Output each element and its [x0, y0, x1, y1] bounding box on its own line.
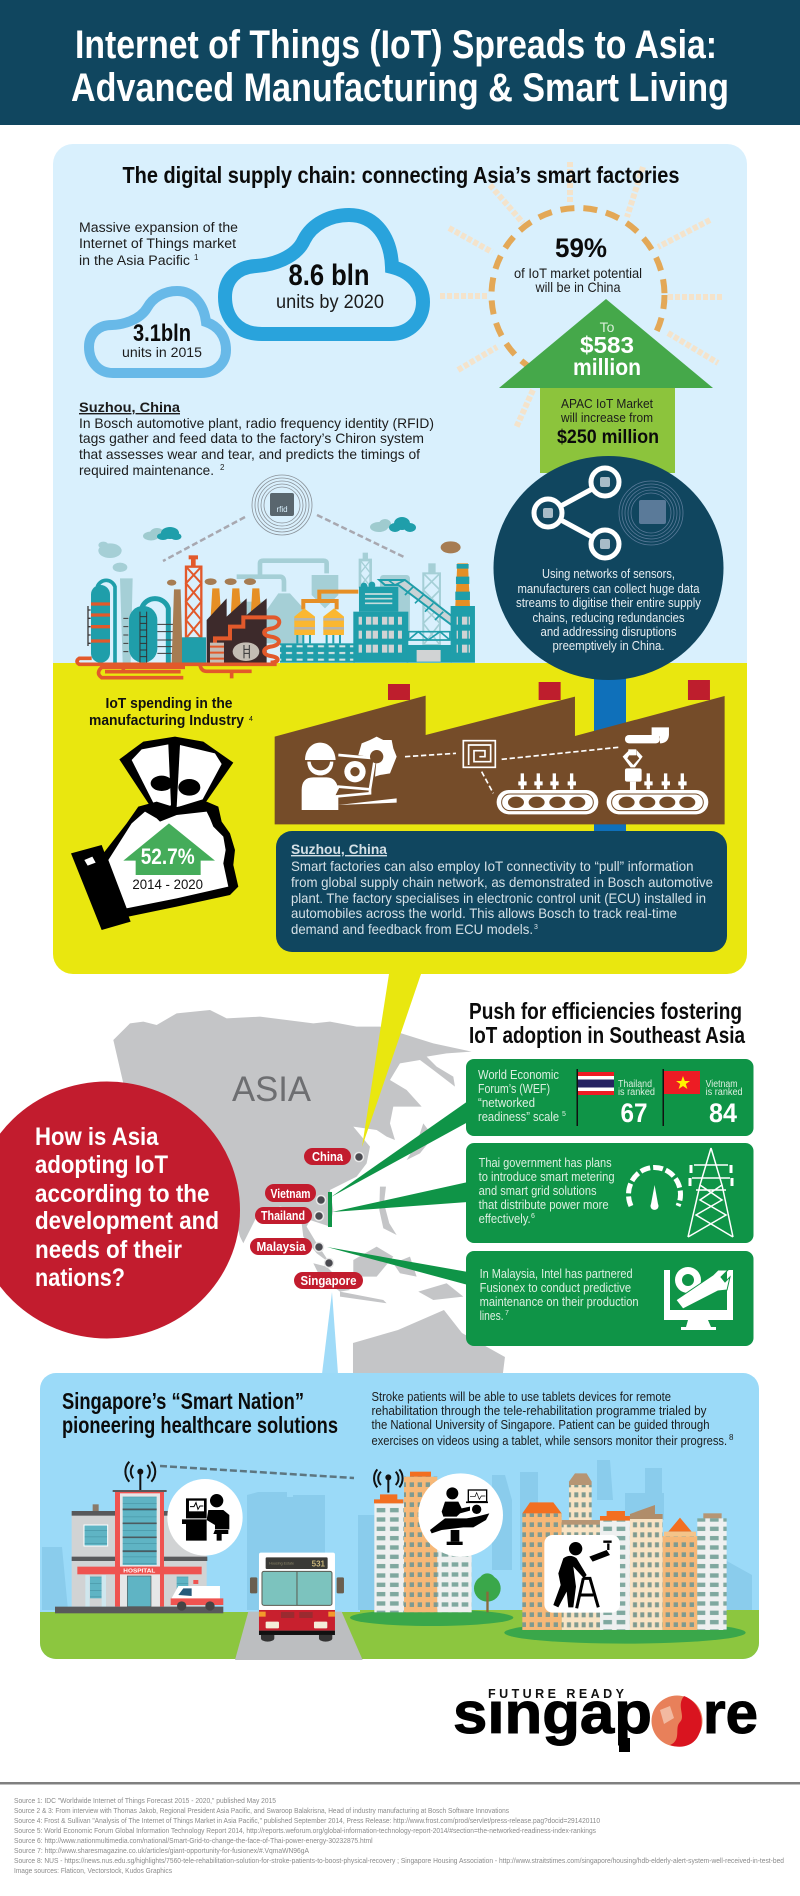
conveyor truss [379, 580, 452, 625]
stat: 52.7 percent: 52.7% [141, 844, 195, 869]
icon: RFID tag [252, 475, 312, 535]
callout: Suzhou pull information: from global supply chain network, as demonstrated in Bosch automotive [291, 874, 713, 890]
stat: 52.7 percent: 2014 - 2020 [132, 876, 203, 892]
worker icon [302, 737, 397, 810]
block A [374, 1503, 404, 1612]
icon: gauge [628, 1167, 680, 1210]
money fan [119, 737, 233, 822]
icon: ambulance [171, 1580, 223, 1611]
stat: 52.7 percent [132, 844, 203, 892]
icon: hand holding money [71, 737, 238, 930]
text: market expansion intro: Massive expansion of the [79, 220, 238, 235]
illustration: factory silhouette with IoT icons [275, 680, 725, 824]
hand [103, 802, 238, 917]
text: Suzhou RFID: In Bosch automotive plant, radio frequency identity (RFID) [79, 415, 434, 431]
text: market expansion intro: 1 [194, 253, 199, 262]
logo: Future Ready Singapore: re [703, 1681, 758, 1746]
icon: monitor with tools [664, 1267, 733, 1330]
panel: Thai smart grid: and smart grid solutions [479, 1184, 597, 1198]
text: market expansion intro [79, 220, 238, 268]
base pipes [77, 658, 277, 678]
header banner [0, 0, 800, 125]
green mound left [350, 1609, 513, 1626]
sources: Source 6: http://www.nationmultimedia.com/national/Smart-Grid-to-change-the-face-of-Thai-power-energy-30232875.html [14, 1838, 373, 1845]
text: Suzhou RFID: that assesses wear and tear, and predicts the timings of [79, 446, 420, 462]
callout: Suzhou pull information: 3 [534, 924, 538, 931]
stat: Thailand 67: is ranked [618, 1087, 655, 1098]
pointer: blue to Singapore [322, 1292, 338, 1374]
sun dashed circle [492, 208, 664, 382]
icon: elderly walker and camera [544, 1535, 620, 1613]
map pins [314, 1152, 364, 1268]
sources: Source 8: NUS - https://news.nus.edu.sg/highlights/7560-tele-rehabilitation-solution-for-stroke-patients-to-boost-physical-recovery ; Singapore Housing Association - http://www.straitstimes.com/singapore/housing/hdb-elderly-alert-system-well-received-in-test-bed [14, 1858, 784, 1865]
cloud: 8.6 bln units by 2020 [225, 215, 423, 334]
stat: Vietnam 84: is ranked [706, 1087, 743, 1098]
brown factory [275, 696, 725, 824]
cloud: 3.1 bln units in 2015: 3.1bln [133, 320, 191, 347]
callout: Suzhou pull information: Suzhou, China [291, 841, 387, 857]
stat: 59 percent: of IoT market potential [514, 265, 642, 281]
block B [404, 1477, 437, 1612]
cloud: 3.1 bln units in 2015: units in 2015 [122, 344, 202, 360]
antenna [374, 1469, 403, 1493]
text: sensors: Using networks of sensors, [542, 566, 675, 581]
red lattice tower [186, 567, 201, 638]
panel: Thai smart grid: Thai government has plans [479, 1156, 612, 1170]
icon: faded RFID tag [619, 481, 683, 545]
panel: Thai smart grid: 6 [531, 1213, 535, 1220]
text: sensors: preemptively in China. [552, 638, 664, 653]
panel: Malaysia predictive maintenance [466, 1251, 754, 1346]
icon: Thai flag [576, 1069, 614, 1126]
panel: Thai smart grid: effectively. [479, 1212, 531, 1226]
panel: Thai smart grid: to introduce smart metering [479, 1170, 615, 1184]
text: tele-rehabilitation [372, 1389, 734, 1448]
stat: 59 percent: 59% [555, 233, 607, 263]
text: tele-rehabilitation: the National University of Singapore. Patient can be guided through [372, 1417, 710, 1432]
text: sensors: and addressing disruptions [540, 624, 677, 639]
text: Suzhou RFID: required maintenance. [79, 462, 214, 478]
map: Asia silhouette [113, 1010, 505, 1373]
icon: RFID tag: rfid [276, 505, 288, 514]
left vessel [97, 580, 115, 663]
pointer: yellow to China [362, 974, 421, 1147]
clouds: small teal [143, 517, 416, 540]
text: tele-rehabilitation: exercises on videos using a tablet, while sensors monitor their progress. [372, 1433, 727, 1448]
illustration: bus [235, 1553, 363, 1660]
icon: RFID chip [463, 741, 495, 767]
illustration: hospital: HOSPITAL [123, 1569, 156, 1575]
green connector wedges [327, 1101, 468, 1285]
panel: networked readiness: World Economic [478, 1068, 559, 1082]
heading: digital supply chain: The digital supply chain: connecting Asia’s smart factories [122, 162, 680, 188]
blue column [594, 670, 626, 835]
pale skyline [42, 1460, 752, 1610]
base and right tower [407, 645, 452, 663]
logo: Future Ready Singapore: singap [453, 1681, 652, 1746]
sources: Source 5: World Economic Forum Global Information Technology Report 2014, http://reports.weforum.org/global-information-technology-report-2014/#section=the-networked-readiness-index-rankings [14, 1828, 596, 1835]
country labels: Singapore [300, 1273, 356, 1288]
sources: Source 4: Frost & Sullivan "Analysis of The Internet of Things Market in Asia Pacific," published September 2014, Press Release: http://www.frost.com/prod/servlet/press-release.pag?docid=291420110 [14, 1818, 600, 1825]
country labels: China [312, 1149, 344, 1164]
country labels [250, 1148, 363, 1289]
sources [14, 1798, 784, 1875]
stat: Thailand 67: 67 [620, 1098, 648, 1128]
dashed wireless link [160, 1466, 354, 1478]
text: sensors: streams to digitise their entire supply [516, 595, 701, 610]
country labels: Malaysia [256, 1239, 306, 1254]
text: sensors [516, 566, 701, 653]
panel: networked readiness: “networked [478, 1096, 535, 1110]
icon: transmission tower [688, 1148, 733, 1237]
icon: antenna [125, 1462, 155, 1490]
green mound right [504, 1622, 746, 1644]
stat: Thailand 67 [618, 1079, 655, 1128]
text: sensors: manufacturers can collect huge data [518, 581, 700, 596]
icon: globe [652, 1696, 702, 1747]
arrow: APAC market growth: To [600, 319, 615, 335]
illustration: bus: Housing Estate [269, 1561, 294, 1565]
heading: Southeast Asia: IoT adoption in Southeast Asia [469, 1022, 745, 1048]
heading: IoT spending: manufacturing Industry [89, 713, 244, 729]
callout: Suzhou pull information: demand and feedback from ECU models. [291, 921, 533, 937]
cuff [71, 845, 131, 930]
red circle: how is Asia adopting IoT: nations? [35, 1264, 125, 1292]
stat: 59 percent [514, 233, 642, 295]
cloud: 8.6 bln units by 2020: 8.6 bln [288, 259, 370, 292]
panel: Malaysia predictive maintenance: lines. [480, 1309, 504, 1323]
icon: Vietnam flag [662, 1069, 700, 1126]
arrow: APAC market growth: $583 [580, 332, 634, 358]
tree [474, 1573, 501, 1612]
orange chimneys [211, 588, 261, 617]
low teal block [280, 643, 355, 663]
label: ASIA: ASIA [232, 1070, 312, 1109]
panel: networked readiness [466, 1059, 754, 1136]
heading: smart nation: Singapore’s “Smart Nation” [62, 1388, 304, 1414]
panel: digital supply chain background [53, 144, 747, 663]
illustration: hospital [55, 1462, 363, 1660]
red circle: how is Asia adopting IoT: adopting IoT [35, 1151, 168, 1179]
arrow: APAC market growth: APAC IoT Market [561, 396, 653, 411]
yellow tanks [303, 592, 358, 609]
stat: Vietnam 84: 84 [709, 1098, 737, 1128]
logo: Future Ready Singapore: FUTURE READY [488, 1687, 625, 1701]
panel: Malaysia predictive maintenance: 7 [505, 1310, 509, 1317]
country labels: Vietnam [270, 1186, 310, 1201]
heading: IoT spending: IoT spending in the [106, 696, 232, 712]
heading: Southeast Asia: Push for efficiencies fostering [469, 998, 742, 1024]
panel: networked readiness: Forum’s (WEF) [478, 1082, 550, 1096]
red chimneys [388, 680, 710, 700]
growth arrow [123, 823, 215, 875]
text: tele-rehabilitation: 8 [729, 1433, 734, 1442]
block C [437, 1547, 472, 1612]
panel: networked readiness: 5 [562, 1111, 566, 1118]
text: tele-rehabilitation: rehabilitation through the tele-rehabilitation programme trialed by [372, 1403, 707, 1418]
callout: Suzhou pull information: plant. The factory specialises in electronic control unit (ECU) installed in [291, 890, 706, 906]
heading: IoT spending [89, 696, 253, 729]
robot arm [623, 727, 669, 790]
stat: Thailand 67: Thailand [618, 1079, 652, 1090]
callout: Suzhou pull information: Smart factories can also employ IoT connectivity to “pull” information [291, 858, 694, 874]
text: Suzhou RFID: Suzhou, China [79, 399, 180, 415]
RFID connection dashes [163, 515, 406, 561]
red circle: how is Asia adopting IoT: needs of their [35, 1236, 182, 1264]
text: Suzhou RFID [79, 399, 434, 478]
conveyors [497, 773, 708, 814]
red circle: how is Asia adopting IoT: development and [35, 1207, 219, 1235]
sources: Source 2 & 3: From interview with Thomas Jakob, Regional President Asia Pacific, and Swaroop Balakrisna, Head of industry manufacturing at Bosch Software Innovations [14, 1808, 509, 1815]
red circle: how is Asia adopting IoT [0, 1082, 240, 1338]
sources: Source 7: http://www.sharesmagazine.co.uk/articles/giant-opportunity-for-fusionex/#.VqmaWN96gA [14, 1848, 309, 1855]
panel: networked readiness: readiness” scale [478, 1110, 559, 1124]
cloud: 3.1 bln units in 2015 [89, 291, 226, 373]
logo: Future Ready Singapore [454, 1689, 756, 1752]
heading: Southeast Asia [469, 998, 745, 1048]
heading: IoT spending: 4 [249, 716, 253, 723]
brown chimney [172, 589, 183, 663]
text: Suzhou RFID: 2 [220, 463, 225, 472]
illustration: housing blocks and patients [350, 1469, 746, 1644]
arrow: APAC market growth: will increase from [560, 410, 653, 425]
stat: Vietnam 84: Vietnam [706, 1079, 738, 1090]
title [71, 23, 729, 110]
stat: Vietnam 84 [706, 1079, 743, 1128]
cloud: 8.6 bln units by 2020: units by 2020 [276, 292, 384, 313]
ground [40, 1610, 759, 1659]
main teal building [353, 612, 408, 663]
pale background structures [98, 542, 440, 663]
text: tele-rehabilitation: Stroke patients will be able to use tablets devices for remote [372, 1389, 671, 1404]
illustration: bus: 531 [312, 1560, 326, 1569]
red circle: how is Asia adopting IoT: How is Asia [35, 1123, 159, 1151]
dark factory [207, 598, 267, 663]
text: sensors: chains, reducing redundancies [532, 610, 685, 625]
panel: Malaysia predictive maintenance: Fusionex to conduct predictive [480, 1281, 631, 1295]
icon: remote rehabilitation [418, 1473, 503, 1557]
right tower cluster [522, 1473, 727, 1630]
divider rule [0, 1782, 800, 1784]
heading: smart nation: pioneering healthcare solutions [62, 1412, 338, 1438]
icon: share network nodes [534, 468, 619, 558]
illustration: smart factory plant [77, 541, 475, 678]
icon: doctor at monitor [167, 1479, 243, 1556]
text: market expansion intro: Internet of Things market [79, 236, 236, 251]
sun dashed rays [440, 162, 724, 428]
panel: Thai smart grid: that distribute power more [479, 1198, 609, 1212]
red circle: how is Asia adopting IoT: according to the [35, 1180, 210, 1208]
panel: Singapore smart nation [40, 1373, 759, 1660]
panel: Malaysia predictive maintenance: In Malaysia, Intel has partnered [480, 1267, 633, 1281]
arrow: APAC market growth: million [573, 354, 641, 380]
panel: yellow manufacturing background [53, 663, 747, 974]
sources: Source 1: IDC "Worldwide Internet of Things Forecast 2015 - 2020," published May 2015 [14, 1798, 276, 1805]
sources: Image sources: Flaticon, Vectorstock, Kudos Graphics [14, 1868, 172, 1875]
panel: Thai smart grid [466, 1143, 754, 1243]
panel: Malaysia predictive maintenance: maintenance on their production [480, 1295, 639, 1309]
arrow: APAC market growth: $250 million [557, 427, 659, 448]
navy circle: network of sensors [494, 456, 724, 680]
dashed data links [405, 747, 618, 793]
country labels: Thailand [261, 1208, 305, 1223]
callout: Suzhou pull information [276, 831, 727, 952]
arrow: APAC market growth [499, 299, 713, 473]
callout: Suzhou pull information: automobiles across the world. This allows Bosch to track real-time [291, 905, 677, 921]
middle vessel [142, 599, 168, 663]
heading: smart nation [62, 1388, 338, 1438]
stat: 59 percent: will be in China [535, 279, 621, 295]
text: market expansion intro: in the Asia Pacific [79, 253, 190, 268]
text: Suzhou RFID: tags gather and feed data to the factory’s Chiron system [79, 430, 424, 446]
